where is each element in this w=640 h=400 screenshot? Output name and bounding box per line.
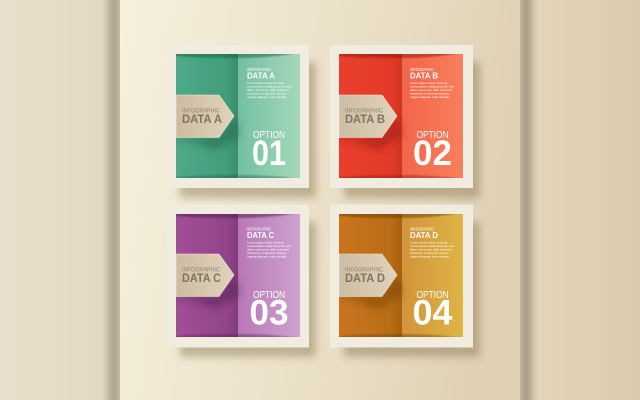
text block: data B: diam nonummy nibh euismod xyxy=(410,88,452,92)
arrow tag: data D: DATA D xyxy=(345,271,385,285)
option number 03: 03 xyxy=(250,294,288,332)
option number 01: OPTION xyxy=(253,130,285,141)
arrow tag: data D: INFOGRAPHIC xyxy=(345,267,383,274)
text block: data D: diam nonummy nibh euismod xyxy=(410,248,452,252)
text block: data A: DATA A xyxy=(247,70,276,80)
text block: data D: magna aliquam erat volutpat. xyxy=(410,254,450,258)
arrow tag: data C: DATA C xyxy=(182,271,221,285)
text block: data D: Lorem ipsum dolor sit amet, xyxy=(410,240,448,244)
panel: option 04 data D xyxy=(330,204,480,357)
arrow tag: data A: INFOGRAPHIC xyxy=(182,108,220,115)
option number 04: 04 xyxy=(412,294,453,332)
arrow tag: data D xyxy=(339,254,397,296)
text block: data A: INFOGRAPHIC xyxy=(247,67,272,72)
text block: data B: Lorem ipsum dolor sit amet, xyxy=(410,81,448,85)
text block: data A xyxy=(247,67,291,99)
arrow tag: data B: DATA B xyxy=(345,112,385,126)
text block: data D: consectetuer adipiscing elit, sed xyxy=(410,244,454,248)
option number 02: 02 xyxy=(413,134,452,173)
text block: data B: DATA B xyxy=(410,70,438,80)
option number 01: 01 xyxy=(252,134,286,173)
panel: option 03 data C xyxy=(166,204,316,357)
text block: data C: tincidunt ut laoreet dolore xyxy=(247,251,286,255)
text block: data D: DATA D xyxy=(410,230,438,240)
option number 02: OPTION xyxy=(416,130,448,141)
option number 04: OPTION xyxy=(416,290,448,301)
text block: data C xyxy=(247,226,291,258)
text block: data C: consectetuer adipiscing elit, sed xyxy=(247,244,291,248)
text block: data D: tincidunt ut laoreet dolore xyxy=(410,251,449,255)
panel: option 02 data B xyxy=(330,45,480,198)
arrow tag: data B: INFOGRAPHIC xyxy=(345,108,383,115)
arrow tag: data A: DATA A xyxy=(182,112,222,126)
text block: data A: magna aliquam erat volutpat. xyxy=(247,95,287,99)
panel: option 01 data A xyxy=(166,45,316,198)
text block: data D xyxy=(410,226,454,258)
text block: data C: Lorem ipsum dolor sit amet, xyxy=(247,240,285,244)
text block: data C: diam nonummy nibh euismod xyxy=(247,248,289,252)
arrow tag: data A xyxy=(176,95,234,138)
text block: data A: tincidunt ut laoreet dolore xyxy=(247,92,286,96)
option number 03: OPTION xyxy=(253,290,285,301)
text block: data B: magna aliquam erat volutpat. xyxy=(410,95,450,99)
arrow tag: data B xyxy=(339,95,397,138)
text block: data C: DATA C xyxy=(247,230,275,240)
text block: data D: INFOGRAPHIC xyxy=(410,226,435,232)
text block: data B: tincidunt ut laoreet dolore xyxy=(410,92,449,96)
text block: data C: magna aliquam erat volutpat. xyxy=(247,254,287,258)
text block: data A: consectetuer adipiscing elit, sed xyxy=(247,84,291,88)
text block: data B xyxy=(410,67,454,99)
text block: data A: Lorem ipsum dolor sit amet, xyxy=(247,81,285,85)
text block: data B: consectetuer adipiscing elit, sed xyxy=(410,84,454,88)
text block: data A: diam nonummy nibh euismod xyxy=(247,88,289,92)
text block: data C: INFOGRAPHIC xyxy=(247,226,272,232)
arrow tag: data C: INFOGRAPHIC xyxy=(182,267,220,274)
arrow tag: data C xyxy=(176,254,234,296)
text block: data B: INFOGRAPHIC xyxy=(410,67,435,72)
